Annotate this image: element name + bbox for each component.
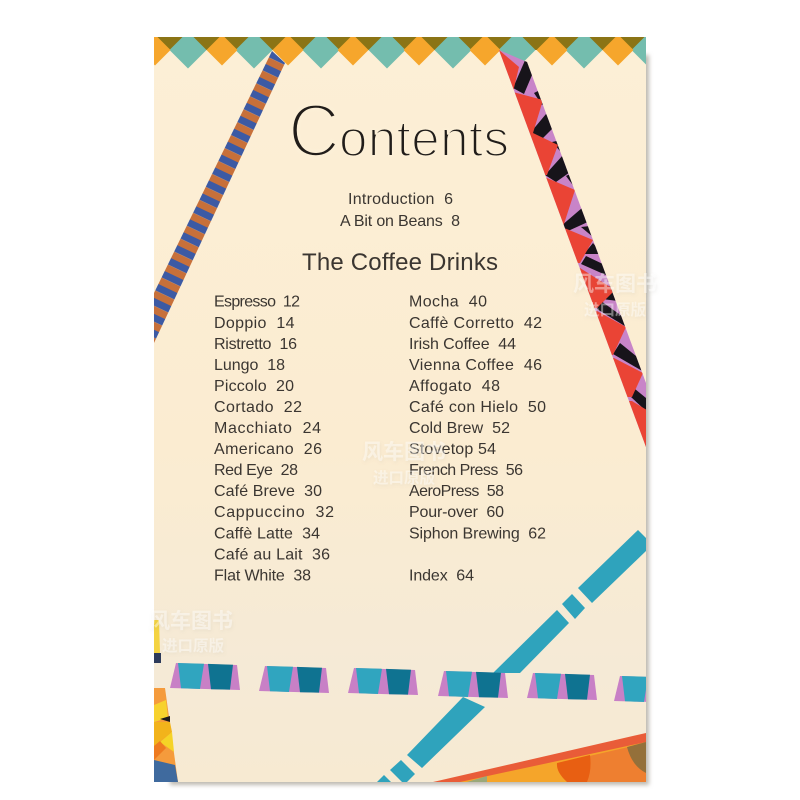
right contents column: Stovetop 54 — [409, 441, 496, 458]
watermark: centre: 进口原版 — [373, 469, 435, 487]
right contents column: Café con Hielo 50 — [409, 399, 546, 416]
red, lavender and black band — [490, 48, 650, 450]
right contents column: French Press 56 — [409, 462, 523, 479]
panel: book page — [154, 37, 646, 782]
entry: mocha: Mocha 40 — [409, 294, 487, 311]
entry: espresso: Espresso 12 — [214, 294, 300, 311]
left contents column: Café au Lait 36 — [214, 546, 330, 563]
right contents column: Affogato 48 — [409, 378, 500, 395]
page shadow — [170, 55, 649, 785]
right contents column: Vienna Coffee 46 — [409, 357, 542, 374]
front matter entries: A Bit on Beans 8 — [340, 213, 460, 230]
left contents column: Macchiato 24 — [214, 420, 321, 437]
watermark: centre — [362, 441, 446, 487]
left contents column: Flat White 38 — [214, 567, 311, 584]
left contents column: Café Breve 30 — [214, 483, 322, 500]
right contents column: Index 64 — [409, 567, 474, 584]
left contents column: Cortado 22 — [214, 399, 302, 416]
heading: the coffee drinks: The Coffee Drinks — [302, 249, 498, 276]
title: C — [288, 88, 340, 172]
left contents column: Ristretto 16 — [214, 336, 297, 353]
bottom right coloured wedge — [433, 733, 646, 782]
watermark: left: 进口原版 — [162, 637, 224, 655]
lavender and teal trapezoid row — [170, 663, 684, 703]
top diamond border — [154, 37, 646, 68]
left contents column: Piccolo 20 — [214, 378, 294, 395]
left contents column: Cappuccino 32 — [214, 504, 334, 521]
watermark: right — [573, 273, 657, 319]
left contents column: Caffè Latte 34 — [214, 525, 320, 542]
title — [288, 88, 509, 172]
right contents column — [409, 294, 546, 584]
blue and orange striped band — [154, 51, 285, 343]
watermark: right: 进口原版 — [584, 301, 646, 319]
title: ontents — [339, 110, 509, 167]
right contents column: AeroPress 58 — [409, 483, 504, 500]
watermark: centre: 风车图书 — [362, 441, 446, 464]
left contents column: Doppio 14 — [214, 315, 295, 332]
right contents column: Cold Brew 52 — [409, 420, 510, 437]
watermark: left: 风车图书 — [149, 610, 233, 633]
right contents column: Pour-over 60 — [409, 504, 504, 521]
right contents column: Siphon Brewing 62 — [409, 525, 546, 542]
left contents column: Americano 26 — [214, 441, 322, 458]
entry: introduction: Introduction 6 — [348, 191, 453, 208]
front matter entries — [340, 191, 460, 230]
right contents column: Caffè Corretto 42 — [409, 315, 542, 332]
left contents column: Red Eye 28 — [214, 462, 298, 479]
bottom left coloured wedge — [154, 620, 178, 782]
artwork layer — [154, 37, 646, 782]
watermark: right: 风车图书 — [573, 273, 657, 296]
watermark: left — [149, 610, 233, 655]
teal diagonal band — [377, 530, 646, 782]
left contents column — [214, 294, 334, 584]
left contents column: Lungo 18 — [214, 357, 285, 374]
right contents column: Irish Coffee 44 — [409, 336, 516, 353]
